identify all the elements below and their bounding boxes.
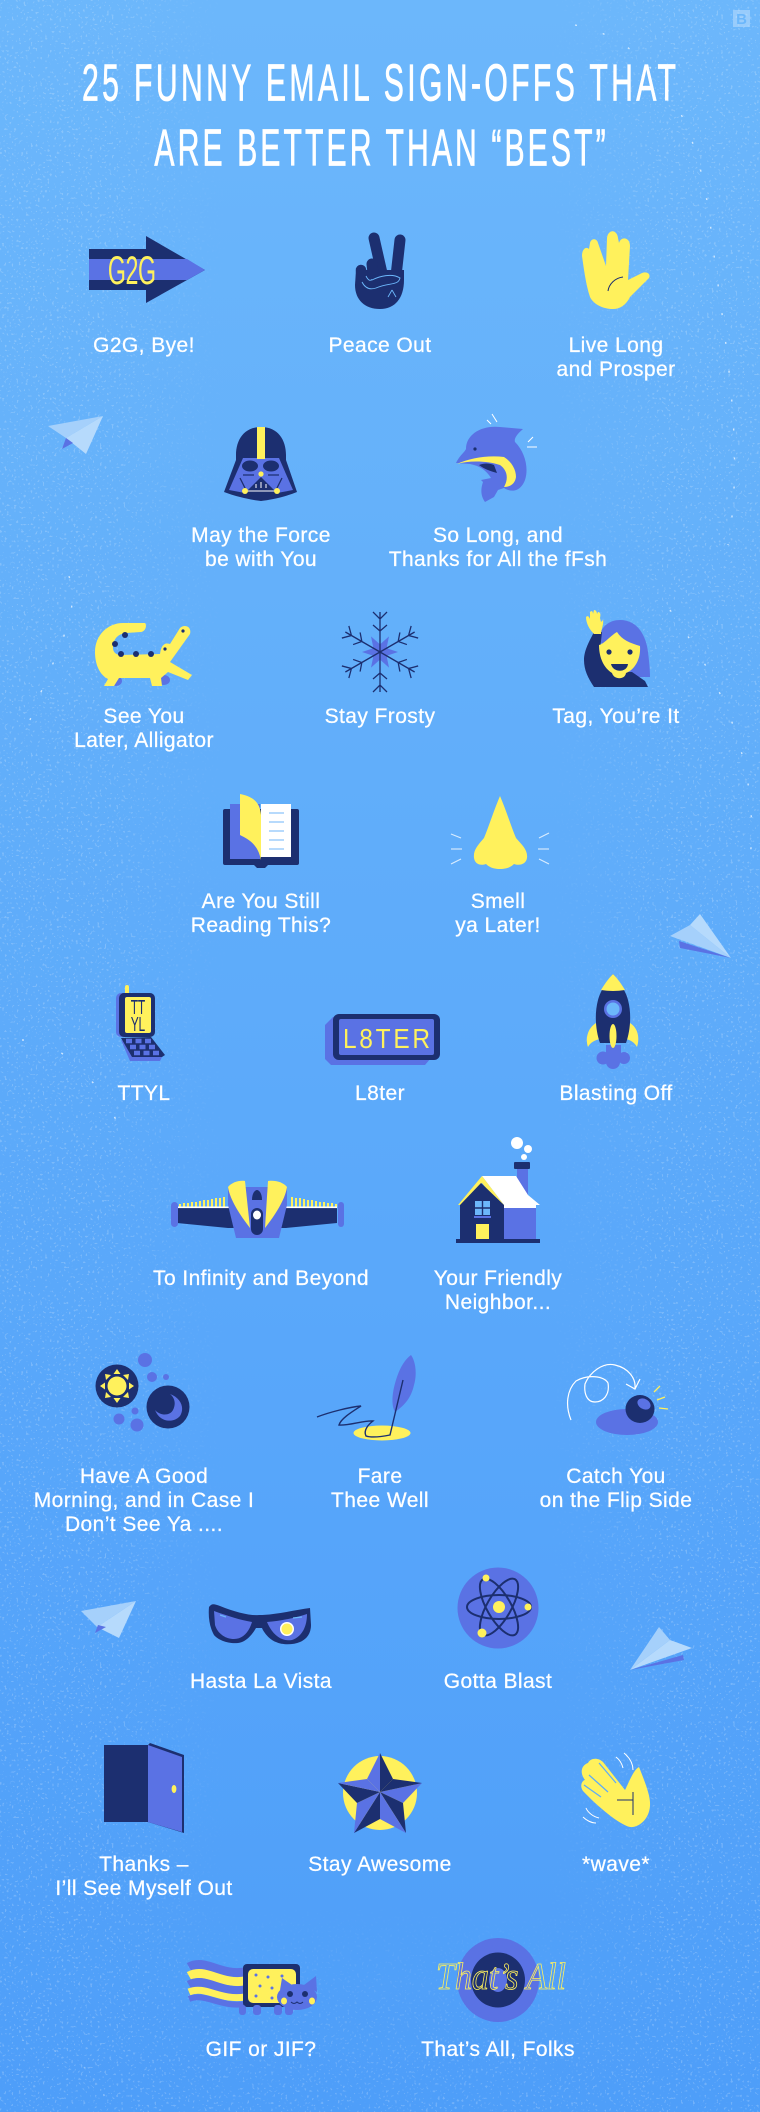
icon: open door xyxy=(104,1743,184,1833)
icon: space ranger wings xyxy=(171,1181,344,1238)
item: Stay Frosty xyxy=(325,612,435,728)
icon: sun and moon xyxy=(96,1353,190,1432)
icon: paper plane xyxy=(81,1601,136,1638)
icon: dolphin xyxy=(456,414,537,502)
label: So Long, and xyxy=(433,524,563,547)
item: Your Friendly Neighbor: Neighbor... xyxy=(445,1291,551,1314)
icon: darth vader xyxy=(224,427,297,501)
label: Have A Good xyxy=(80,1465,208,1488)
title: ARE BETTER THAN “BEST” xyxy=(154,120,606,178)
item: Thanks – See Myself Out: I’ll See Myself Out xyxy=(55,1877,233,1900)
icon: rocket xyxy=(587,974,638,1069)
item: Live Long and Prosper: and Prosper xyxy=(556,358,676,381)
label: May the Force xyxy=(191,524,331,547)
label: Stay Awesome xyxy=(308,1853,452,1876)
item: GIF or JIF xyxy=(189,1964,317,2061)
item: Live Long and Prosper xyxy=(556,231,676,381)
title xyxy=(82,55,676,178)
label: Catch You xyxy=(566,1465,666,1488)
item: Blasting Off xyxy=(559,974,673,1105)
label: Gotta Blast xyxy=(444,1670,552,1693)
icon: nose xyxy=(451,796,549,869)
item: Have A Good Morning: Don’t See Ya .... xyxy=(65,1513,223,1536)
item: Hasta La Vista xyxy=(190,1604,332,1693)
item: Peace Out xyxy=(328,238,432,357)
icon: nyan cat xyxy=(189,1964,317,2015)
label: Fare xyxy=(358,1465,402,1488)
item: Are You Still: Reading This? xyxy=(191,914,331,937)
label: Stay Frosty xyxy=(325,705,435,728)
label: Hasta La Vista xyxy=(190,1670,332,1693)
item: Tag xyxy=(552,610,680,728)
icon: flipping ball xyxy=(568,1364,668,1435)
label: *wave* xyxy=(582,1853,650,1876)
icon: looney rings: That’s All xyxy=(436,1955,566,1997)
item: May the Force xyxy=(191,427,331,571)
icon: peace hand xyxy=(355,238,404,309)
label: TTYL xyxy=(117,1082,171,1105)
icon: flip phone: TT xyxy=(131,997,145,1019)
label: Are You Still xyxy=(202,890,320,913)
item: Have A Good Morning xyxy=(34,1353,254,1536)
icon: paper plane xyxy=(670,914,731,958)
icon: star xyxy=(338,1753,422,1833)
item: G2G, Bye! xyxy=(89,236,205,357)
icon: arrow: G2G xyxy=(108,247,156,293)
item: That's All, Folks xyxy=(421,1938,575,2061)
icon: waving hand xyxy=(581,1753,650,1827)
item: TTYL xyxy=(116,985,171,1105)
icon: paper plane xyxy=(48,416,103,454)
label: L8ter xyxy=(355,1082,405,1105)
label: Peace Out xyxy=(328,334,432,357)
item: So Long xyxy=(389,414,607,571)
label: Smell xyxy=(471,890,525,913)
title: 25 FUNNY EMAIL SIGN-OFFS THAT xyxy=(82,55,676,113)
icon: LCD display: L8TER xyxy=(343,1022,430,1054)
item: wave xyxy=(581,1753,650,1876)
item: Have A Good Morning: Morning, and in Case I xyxy=(34,1489,254,1512)
item: Smell ya Later xyxy=(451,796,549,937)
item: Stay Awesome xyxy=(308,1753,452,1876)
label: To Infinity and Beyond xyxy=(153,1267,369,1290)
item: So Long: Thanks for All the fFsh xyxy=(389,548,607,571)
icon: vulcan salute xyxy=(582,231,650,309)
item: Catch You on the Flip Side xyxy=(540,1364,692,1512)
icon: girl raising hand xyxy=(584,610,650,687)
item: Fare Thee Well xyxy=(317,1355,429,1512)
label: G2G, Bye! xyxy=(93,334,195,357)
item: Smell ya Later: ya Later! xyxy=(455,914,541,937)
label: That’s All, Folks xyxy=(421,2038,575,2061)
icon: alligator xyxy=(95,623,192,686)
item: Are You Still xyxy=(191,794,331,937)
logo badge: B xyxy=(736,11,747,28)
item: Gotta Blast xyxy=(444,1568,552,1693)
icon: atom xyxy=(458,1568,538,1648)
label: Live Long xyxy=(569,334,663,357)
icon: quill xyxy=(317,1355,416,1440)
icon: open book xyxy=(223,794,299,868)
item: See You Later: Later, Alligator xyxy=(74,729,214,752)
icon: paper plane xyxy=(630,1627,692,1670)
item: Thanks – See Myself Out xyxy=(55,1743,233,1900)
label: Tag, You’re It xyxy=(552,705,680,728)
item: To Infinity xyxy=(153,1181,369,1290)
label: Your Friendly xyxy=(434,1267,562,1290)
icon: flip phone: YL xyxy=(131,1014,145,1036)
item: See You Later xyxy=(74,623,214,752)
item: Your Friendly Neighbor xyxy=(434,1137,562,1314)
icon: flip phone xyxy=(116,985,165,1061)
item: May the Force: be with You xyxy=(205,548,317,571)
icon: snowflake xyxy=(342,612,418,692)
icon: looney rings xyxy=(436,1938,566,2022)
label: GIF or JIF? xyxy=(206,2038,316,2061)
item: Fare Thee Well: Thee Well xyxy=(331,1489,429,1512)
item: L8ter xyxy=(325,1014,440,1105)
label: Thanks – xyxy=(99,1853,189,1876)
label: See You xyxy=(103,705,185,728)
logo badge xyxy=(733,10,750,28)
icon: house xyxy=(456,1137,540,1243)
icon: sunglasses xyxy=(209,1604,311,1644)
label: Blasting Off xyxy=(559,1082,673,1105)
item: Catch You on the Flip Side: on the Flip Side xyxy=(540,1489,692,1512)
